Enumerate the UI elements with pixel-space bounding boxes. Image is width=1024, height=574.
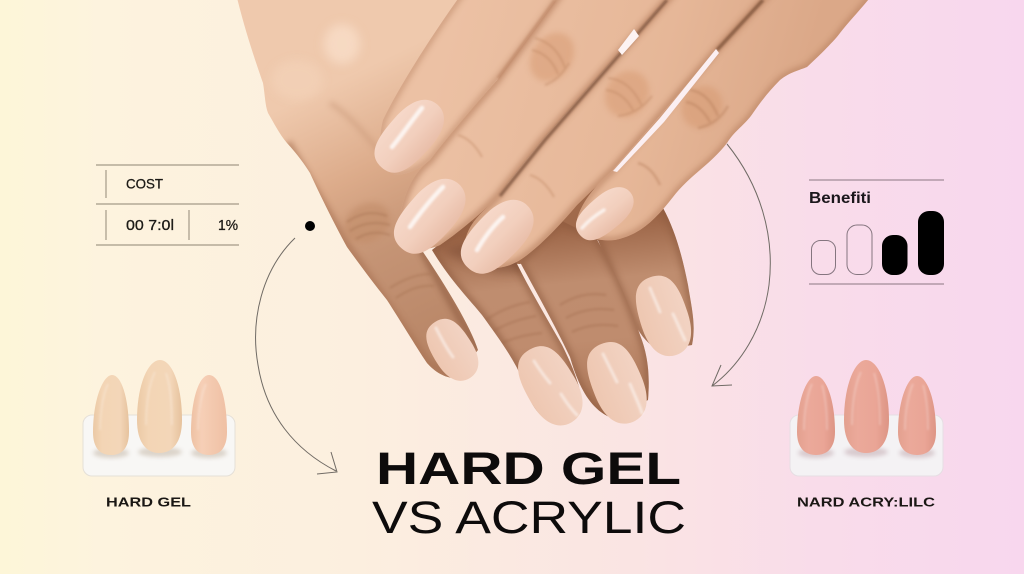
hand photo illustration	[234, 0, 880, 435]
upper finger 3	[464, 0, 777, 268]
nail 8	[628, 270, 699, 362]
nail tips	[798, 447, 935, 458]
nail 2	[383, 168, 477, 264]
filled bars	[882, 211, 944, 275]
arrow: left curved arrow	[256, 238, 337, 474]
cost table	[96, 165, 239, 245]
label: acrylic: NARD ACRY:LILC	[797, 494, 936, 510]
title: HARD GEL	[376, 443, 681, 494]
shadow cast by upper fingers	[446, 242, 522, 276]
title: VS ACRYLIC	[372, 492, 686, 543]
knuckle of lower finger 1	[345, 202, 389, 242]
skin backing behind fingers	[436, 170, 660, 264]
white gaps between fingers	[618, 29, 639, 55]
nail 5	[418, 311, 487, 389]
upper finger 2	[398, 0, 680, 249]
benefit chart	[809, 180, 944, 284]
nail tips	[93, 447, 227, 458]
cost value: 00 7:0l	[126, 217, 174, 234]
percent value: 1%	[218, 217, 238, 234]
upper finger 1	[380, 0, 566, 175]
nail 1	[364, 89, 455, 183]
dot marker	[305, 221, 315, 231]
plate	[83, 415, 235, 476]
back of hand and lower finger 1	[234, 0, 478, 378]
label: hard gel: HARD GEL	[106, 494, 191, 510]
nail 3	[450, 189, 545, 284]
swatch: hard gel	[83, 360, 235, 476]
cost label: COST	[126, 176, 163, 192]
lower finger 2	[432, 220, 582, 422]
nail 6	[508, 337, 593, 435]
nails	[364, 89, 699, 435]
palm highlights	[324, 24, 360, 64]
lower finger 4	[597, 200, 694, 350]
upper finger 4	[577, 0, 880, 240]
nail 7	[578, 335, 656, 431]
outlined bars	[812, 225, 872, 274]
benefit heading: Benefiti	[809, 190, 871, 207]
shadow crease to thumb side	[330, 102, 376, 148]
plate	[790, 415, 943, 476]
dark gaps between upper fingers	[500, 0, 667, 196]
swatch: acrylic	[790, 360, 943, 476]
nail 4	[568, 179, 642, 248]
arrow: right curved arrow	[712, 144, 770, 386]
title	[372, 443, 686, 543]
lower finger 3	[520, 220, 649, 418]
